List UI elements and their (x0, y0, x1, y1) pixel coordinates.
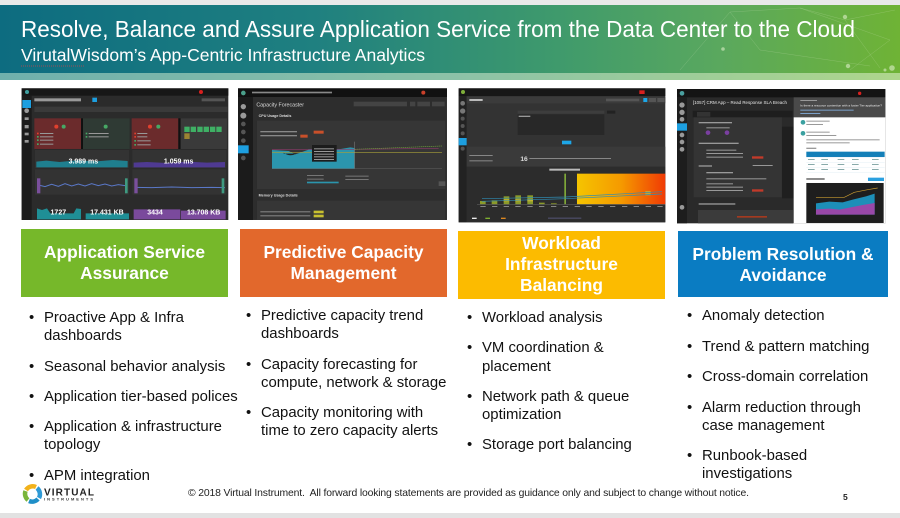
panel: problem resolution and avoidance (678, 231, 888, 297)
list: application service assurance: • (29, 468, 34, 484)
list: workload infrastructure balancing: VM coordination & (482, 340, 604, 356)
list: workload infrastructure balancing: Workload analysis (482, 310, 603, 326)
list: workload infrastructure balancing: • (467, 340, 472, 356)
list: workload infrastructure balancing: placement (482, 359, 552, 375)
list: predictive capacity management: Predictive capacity trend (261, 308, 423, 324)
screenshot: app performance dashboard: 13.708 KB (187, 209, 220, 216)
panel: problem resolution and avoidance: Avoidance (739, 265, 827, 285)
list: workload infrastructure balancing (467, 310, 632, 453)
list: problem resolution and avoidance: investigations (702, 466, 792, 482)
panel: application service assurance: Application Service (44, 242, 205, 262)
list: problem resolution and avoidance: • (687, 400, 692, 416)
panel: predictive capacity management: Management (290, 263, 397, 283)
list: predictive capacity management: Capacity forecasting for (261, 357, 417, 373)
panel: workload infrastructure balancing: Infrastructure (505, 254, 618, 274)
list: application service assurance: • (29, 359, 34, 375)
list: workload infrastructure balancing: optimization (482, 407, 561, 423)
list: problem resolution and avoidance: case management (702, 418, 825, 434)
panel: workload infrastructure balancing: Balancing (520, 275, 603, 295)
panel: application service assurance: Assurance (80, 263, 169, 283)
footer disclaimer: © 2018 Virtual Instrument. All forward looking statements are provided as guidance only and subject to change without notice. (188, 488, 749, 499)
list: application service assurance: • (29, 310, 34, 326)
list: problem resolution and avoidance: Runbook-based (702, 448, 807, 464)
screenshot: app performance dashboard: 17.431 KB (90, 209, 124, 216)
panel: predictive capacity management (240, 229, 447, 297)
panel: predictive capacity management: Predictive Capacity (263, 242, 424, 262)
panel: application service assurance (21, 229, 228, 297)
panel: workload infrastructure balancing: Workload (522, 233, 601, 253)
subtitle: VirutalWisdom’s App-Centric Infrastructure Analytics (21, 45, 425, 65)
list: workload infrastructure balancing: Storage port balancing (482, 437, 632, 453)
panel: workload infrastructure balancing (458, 231, 665, 299)
panel: problem resolution and avoidance: Problem Resolution & (692, 244, 874, 264)
list: predictive capacity management: compute, network & storage (261, 375, 446, 391)
list: application service assurance: dashboards (44, 328, 122, 344)
list: workload infrastructure balancing: • (467, 437, 472, 453)
list: workload infrastructure balancing: • (467, 389, 472, 405)
screenshot: CRM app SLA breach (677, 89, 885, 223)
list: application service assurance: APM integration (44, 468, 150, 484)
list: problem resolution and avoidance: Anomaly detection (702, 308, 825, 324)
screenshot: capacity forecaster (238, 88, 447, 220)
list: application service assurance: Application & infrastructure (44, 419, 222, 435)
list: application service assurance: Proactive App & Infra (44, 310, 185, 326)
screenshot: app performance dashboard (22, 88, 228, 220)
logo: virtual instruments (25, 486, 94, 502)
list: predictive capacity management: Capacity monitoring with (261, 405, 423, 421)
list: application service assurance: Application tier-based polices (44, 389, 238, 405)
logo: virtual instruments: INSTRUMENTS (44, 496, 93, 502)
list: problem resolution and avoidance: • (687, 369, 692, 385)
list: application service assurance: topology (44, 437, 101, 453)
list: predictive capacity management: • (246, 357, 251, 373)
list: problem resolution and avoidance: Cross-domain correlation (702, 369, 868, 385)
list: workload infrastructure balancing: • (467, 310, 472, 326)
title: Resolve, Balance and Assure Application Service from the Data Center to the Cloud (21, 16, 855, 42)
screenshot: capacity forecaster: Memory Usage Details (259, 194, 298, 198)
list: predictive capacity management: dashboards (261, 326, 339, 342)
list: application service assurance: Seasonal behavior analysis (44, 359, 225, 375)
list: predictive capacity management: • (246, 405, 251, 421)
list: problem resolution and avoidance: Alarm reduction through (702, 400, 861, 416)
list: problem resolution and avoidance: Trend & pattern matching (702, 339, 869, 355)
header banner (0, 5, 900, 80)
list: application service assurance: • (29, 419, 34, 435)
list: application service assurance: • (29, 389, 34, 405)
screenshot: app performance dashboard: 3.989 ms (69, 159, 98, 166)
screenshot: capacity forecaster: Capacity Forecaster (256, 102, 304, 108)
screenshot: capacity forecaster: CPU Usage Details (259, 114, 291, 118)
logo: virtual instruments: VIRTUAL (44, 488, 94, 498)
screenshot: queue solver (459, 88, 665, 222)
list: application service assurance (29, 310, 238, 484)
list: problem resolution and avoidance: • (687, 308, 692, 324)
list: predictive capacity management: time to zero capacity alerts (261, 423, 438, 439)
screenshot: queue solver: 16 (520, 156, 528, 163)
list: predictive capacity management (246, 308, 446, 439)
screenshot: CRM app SLA breach: [1057] CRM App – Read Response SLA Breach (693, 100, 787, 106)
screenshot: app performance dashboard: 1727 (51, 209, 66, 216)
list: predictive capacity management: • (246, 308, 251, 324)
list: workload infrastructure balancing: Network path & queue (482, 389, 629, 405)
screenshot: app performance dashboard: 1.059 ms (164, 159, 194, 166)
screenshot: app performance dashboard: 3434 (147, 209, 163, 216)
list: problem resolution and avoidance: • (687, 448, 692, 464)
screenshot: CRM app SLA breach: Is there a resource contention with a foster Tier application? (800, 104, 882, 108)
page number: 5 (843, 492, 848, 502)
list: problem resolution and avoidance: • (687, 339, 692, 355)
list: problem resolution and avoidance (687, 308, 869, 482)
